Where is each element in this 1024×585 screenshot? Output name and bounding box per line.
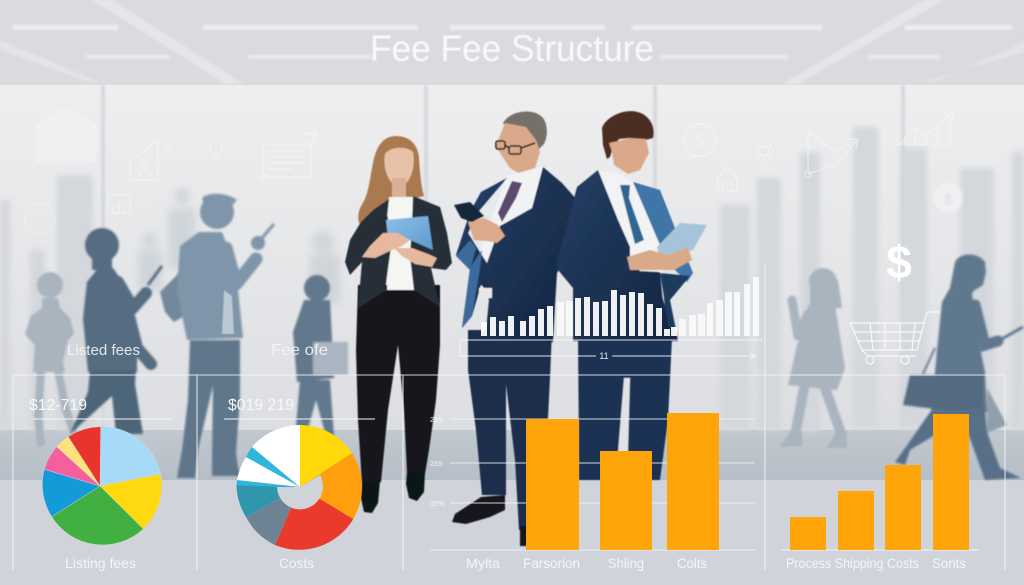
icon: dollar bubble: $ (696, 133, 705, 150)
older man hand (468, 218, 505, 243)
small white bar chart overlay (460, 277, 762, 361)
grid lines (430, 419, 755, 550)
icon: clock (25, 203, 55, 233)
young man face (609, 138, 649, 174)
icon: location pin (210, 141, 222, 157)
woman face (384, 148, 414, 186)
handbag (903, 375, 983, 415)
backpack (160, 272, 188, 322)
icon: house with person (130, 140, 171, 180)
walking woman with bags far right (895, 254, 1023, 480)
icon: dollar bubble (684, 124, 716, 159)
heading: listed fees: Listed fees (67, 342, 140, 359)
panel: orange bar chart (430, 413, 755, 571)
icon: trend chart (898, 111, 953, 144)
category labels: Mylta (466, 555, 500, 571)
woman with bag centre-left (293, 275, 348, 436)
value: fee range: $12-719 (29, 397, 87, 414)
man shirt (222, 290, 234, 334)
outline icons on the windows (25, 110, 953, 233)
donut chart: costs (236, 425, 362, 550)
axis labels: 255 (430, 459, 443, 468)
small woman far left (25, 272, 74, 443)
bars (790, 414, 969, 550)
category labels: Farsorion (523, 555, 580, 571)
caption: listing fees: Listing fees (65, 555, 136, 571)
tall man with phone and backpack (160, 194, 274, 478)
category labels: Process Shipping Costs (786, 555, 919, 571)
older man shoes (452, 495, 505, 524)
icon: large dollar sign: $ (886, 236, 912, 288)
young man hands (627, 247, 692, 270)
older man light sleeve (456, 240, 482, 328)
woman trousers and shoes (356, 285, 440, 484)
man head, jacket and arm (177, 194, 274, 340)
older man face (496, 123, 540, 174)
axis labels: 255 (430, 415, 443, 424)
title: Fee Fee Structure (370, 28, 654, 69)
young man tablet (657, 223, 707, 260)
young man trousers (578, 338, 672, 480)
three business people in the foreground (345, 111, 707, 546)
woman shirt (387, 197, 414, 290)
heading: fee of: Fee ofe (271, 342, 328, 359)
icon: gear (755, 142, 773, 160)
man with phone left (70, 228, 162, 434)
category labels: Sonts (932, 555, 966, 571)
icon: blurred dollar coin (933, 183, 963, 213)
young man hair (602, 111, 654, 159)
category labels (466, 555, 707, 571)
older man white belt (479, 288, 492, 298)
icon: small chart (108, 195, 130, 213)
black phone (454, 202, 484, 222)
faint rear figures (138, 188, 340, 304)
young man navy jacket (557, 170, 678, 341)
panel: listed fees (29, 342, 172, 571)
panel: shipping costs bar chart (781, 414, 979, 571)
second bag (987, 388, 1007, 433)
older man hair (503, 111, 547, 149)
woman hands (362, 233, 410, 258)
young man tie (620, 185, 644, 244)
distant city skyline (0, 127, 1024, 432)
young man shirt (598, 170, 665, 298)
walking woman centre-right (780, 268, 847, 448)
woman in dark suit with blue folder (345, 136, 452, 513)
older man trousers (468, 330, 552, 530)
category labels: Shling (608, 555, 644, 571)
icon: chart board (259, 132, 316, 180)
icon: arrow chart (805, 132, 858, 177)
young man in navy suit (557, 111, 707, 480)
icon: small house (716, 167, 738, 191)
older man shirt and tie (478, 166, 543, 290)
silhouettes of background shoppers (25, 188, 1023, 480)
value: fee amount: $019 219 (228, 397, 294, 414)
axis labels (430, 415, 445, 508)
bars (526, 413, 719, 550)
older man navy jacket (456, 167, 578, 342)
panel: fee structure (224, 342, 375, 571)
axis with arrow: 11 (599, 351, 609, 361)
woman jacket (345, 196, 452, 308)
axis labels: 35% (430, 499, 445, 508)
older man in navy suit (452, 111, 578, 546)
woman hair (358, 136, 424, 229)
young man blue lining and sleeve (633, 182, 693, 282)
caption: costs: Costs (279, 555, 314, 571)
panel frame lines (13, 263, 1005, 570)
icon: blurred dollar coin: $ (944, 191, 953, 208)
icon: shopping cart (850, 312, 940, 364)
axis with arrow (460, 340, 762, 361)
woman blue folder (386, 216, 433, 250)
man trousers (177, 340, 241, 478)
icon: glasses (496, 141, 535, 154)
category labels: Colts (677, 555, 707, 571)
pie chart: listing fees (42, 427, 162, 545)
icon: envelope (36, 110, 97, 162)
